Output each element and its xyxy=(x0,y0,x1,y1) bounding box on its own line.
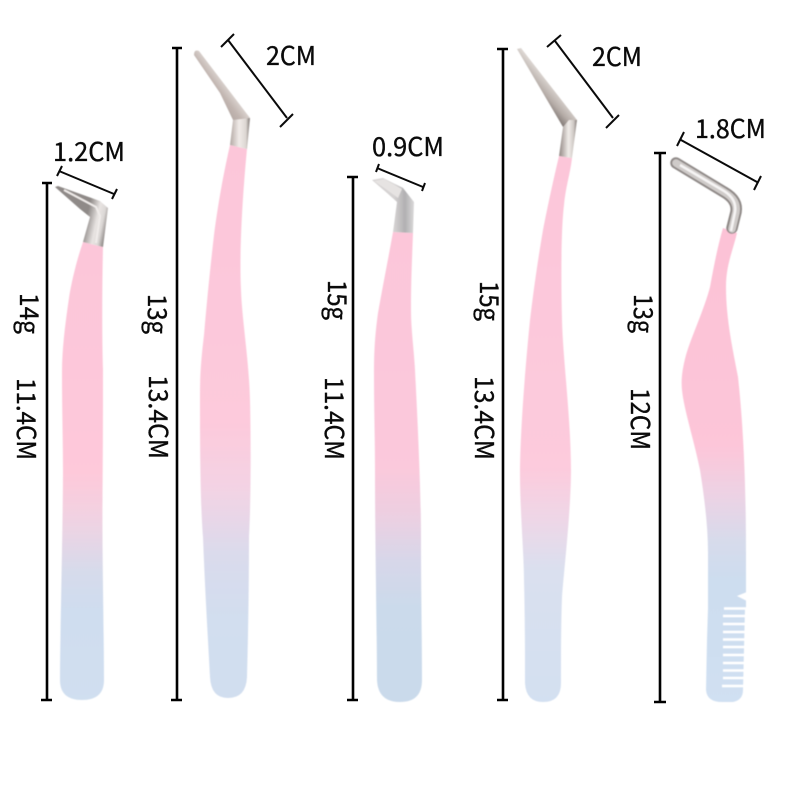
tweezer 1: 1.2CM tip xyxy=(55,186,108,700)
tweezer 3 handle xyxy=(374,232,422,702)
tweezer 5 metal tube body xyxy=(676,163,736,229)
label: 2CM (tweezer 4): 2CM xyxy=(592,37,642,74)
tweezer 4 metal blade xyxy=(517,48,577,127)
label: 0.9CM: 0.9CM xyxy=(372,127,444,164)
dimension: 2CM tip bracket (tweezer 4) xyxy=(547,35,619,128)
dimension: tweezer 4 length bar xyxy=(497,49,508,700)
tweezer 1 tip highlight xyxy=(64,190,100,243)
tweezer 3: 0.9CM tip xyxy=(372,178,422,702)
tweezer 5 handle xyxy=(682,228,746,702)
tweezer 5 comb teeth gaps xyxy=(722,608,747,686)
tweezer 5 metal tube outline xyxy=(676,163,736,228)
dimension: 1.2CM tip bracket xyxy=(57,166,117,199)
label: 1.8CM: 1.8CM xyxy=(695,109,766,146)
tweezer 1 handle xyxy=(60,242,104,700)
label: 13g (tweezer 2): 13g xyxy=(140,294,177,334)
label: 14g: 14g xyxy=(12,293,49,334)
dimension: 2CM tip bracket (tweezer 2) xyxy=(221,34,293,127)
tweezer 2 metal shank xyxy=(230,118,250,149)
label: 12CM: 12CM xyxy=(623,388,660,450)
label: 13.4CM (tweezer 2): 13.4CM xyxy=(141,375,178,459)
label: 15g (tweezer 3): 15g xyxy=(320,280,357,320)
tweezer 4 handle xyxy=(520,156,572,702)
label: 13g (tweezer 5): 13g xyxy=(626,294,663,333)
dimension: tweezer 1 length bar xyxy=(41,183,52,700)
label: 11.4CM (tweezer 1): 11.4CM xyxy=(9,378,46,460)
tweezer 3 tip shine xyxy=(374,179,402,198)
label: 15g (tweezer 4): 15g xyxy=(472,281,509,321)
tweezer 4: 2CM tip xyxy=(517,48,577,702)
dimension: tweezer 3 length bar xyxy=(347,177,358,700)
label: 11.4CM (tweezer 3): 11.4CM xyxy=(317,377,354,460)
label: 2CM (tweezer 2): 2CM xyxy=(266,36,316,73)
tweezer 3 metal tip xyxy=(372,178,414,233)
tweezer 4 metal shank xyxy=(559,120,577,158)
dimension: 0.9CM tip bracket xyxy=(376,164,425,191)
tweezer 2 metal blade xyxy=(194,50,250,124)
dimension: 1.8CM tip bracket xyxy=(677,132,761,190)
tweezer 1 metal tip xyxy=(55,186,108,247)
tweezer 2 handle xyxy=(200,145,251,698)
tweezer 5 comb notch xyxy=(737,592,747,601)
tweezer 2: 2CM tip xyxy=(194,50,251,698)
label: 1.2CM: 1.2CM xyxy=(53,132,125,169)
dimension: tweezer 2 length bar xyxy=(171,48,182,700)
dimension: tweezer 5 length bar xyxy=(654,153,666,702)
label: 13.4CM (tweezer 4): 13.4CM xyxy=(467,376,504,460)
tweezer 5: comb tweezer, 1.8CM tip xyxy=(676,163,747,702)
tweezer 5 metal tube shine xyxy=(680,165,735,231)
